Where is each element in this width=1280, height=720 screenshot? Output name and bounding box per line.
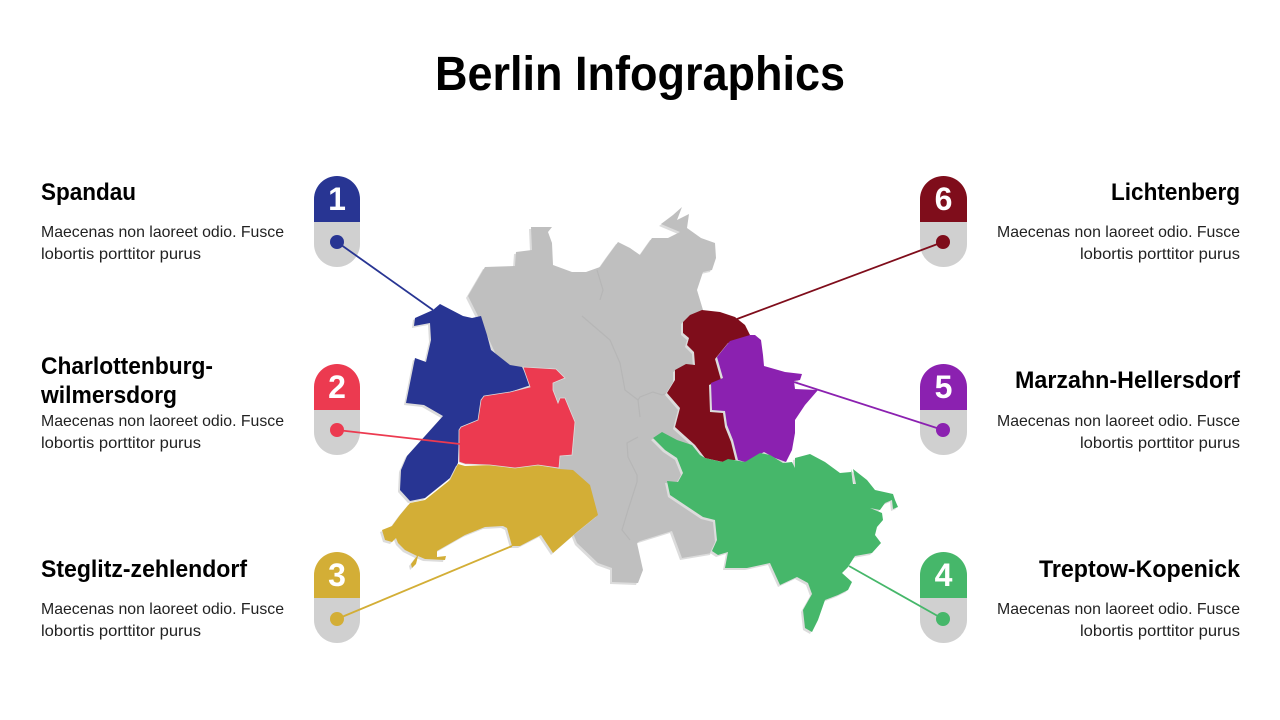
connector line and dot	[794, 382, 950, 437]
description: Maecenas non laoreet odio. Fusce	[997, 224, 1240, 241]
heading: Steglitz-zehlendorf	[41, 556, 248, 583]
panel: Charlottenburg-wilmersdorg	[40, 353, 460, 455]
description: lobortis porttitor purus	[41, 246, 201, 263]
district: Marzahn-Hellersdorf	[711, 335, 818, 462]
panel: Lichtenberg	[737, 176, 1240, 319]
district: Steglitz-Zehlendorf	[382, 464, 598, 568]
number pill 5: 5	[935, 369, 952, 405]
description: Maecenas non laoreet odio. Fusce	[41, 224, 284, 241]
description: lobortis porttitor purus	[1080, 435, 1240, 452]
connector line and dot	[330, 423, 460, 444]
panel: Spandau	[41, 176, 433, 310]
connector line and dot	[849, 566, 950, 626]
district: Lichtenberg	[667, 310, 750, 462]
map of Berlin	[382, 207, 898, 632]
number pill 1: 1	[328, 181, 346, 217]
heading: Spandau	[41, 179, 136, 206]
panel: Marzahn-Hellersdorf	[794, 364, 1241, 455]
title: Berlin Infographics	[435, 48, 845, 101]
number pill 1	[314, 176, 360, 267]
heading: Treptow-Kopenick	[1039, 556, 1241, 583]
description: Maecenas non laoreet odio. Fusce	[997, 601, 1240, 618]
district: Charlottenburg-Wilmersdorf	[459, 367, 575, 468]
connector line and dot	[330, 235, 433, 310]
panel: Treptow-Kopenick	[849, 552, 1241, 643]
description: lobortis porttitor purus	[1080, 246, 1240, 263]
heading: Marzahn-Hellersdorf	[1015, 367, 1241, 394]
connector line and dot	[737, 235, 950, 319]
number pill 2	[314, 364, 360, 455]
number pill 6	[920, 176, 967, 267]
map base: remaining districts	[468, 207, 720, 583]
district: Spandau	[400, 304, 531, 501]
heading: wilmersdorg	[40, 382, 177, 409]
description: Maecenas non laoreet odio. Fusce	[41, 601, 284, 618]
number pill 5	[920, 364, 967, 455]
number pill 6: 6	[935, 181, 952, 217]
description: Maecenas non laoreet odio. Fusce	[997, 413, 1240, 430]
description: lobortis porttitor purus	[41, 623, 201, 640]
district: Treptow-Kopenick	[653, 432, 898, 632]
connector line and dot	[330, 546, 512, 626]
description: Maecenas non laoreet odio. Fusce	[41, 413, 284, 430]
panel: Steglitz-zehlendorf	[41, 546, 512, 643]
heading: Charlottenburg-	[41, 353, 213, 380]
description: lobortis porttitor purus	[41, 435, 201, 452]
number pill 2: 2	[328, 369, 346, 405]
number pill 3: 3	[328, 557, 346, 593]
number pill 4: 4	[935, 557, 953, 593]
number pill 3	[314, 552, 360, 643]
heading: Lichtenberg	[1111, 179, 1240, 206]
description: lobortis porttitor purus	[1080, 623, 1240, 640]
number pill 4	[920, 552, 967, 643]
